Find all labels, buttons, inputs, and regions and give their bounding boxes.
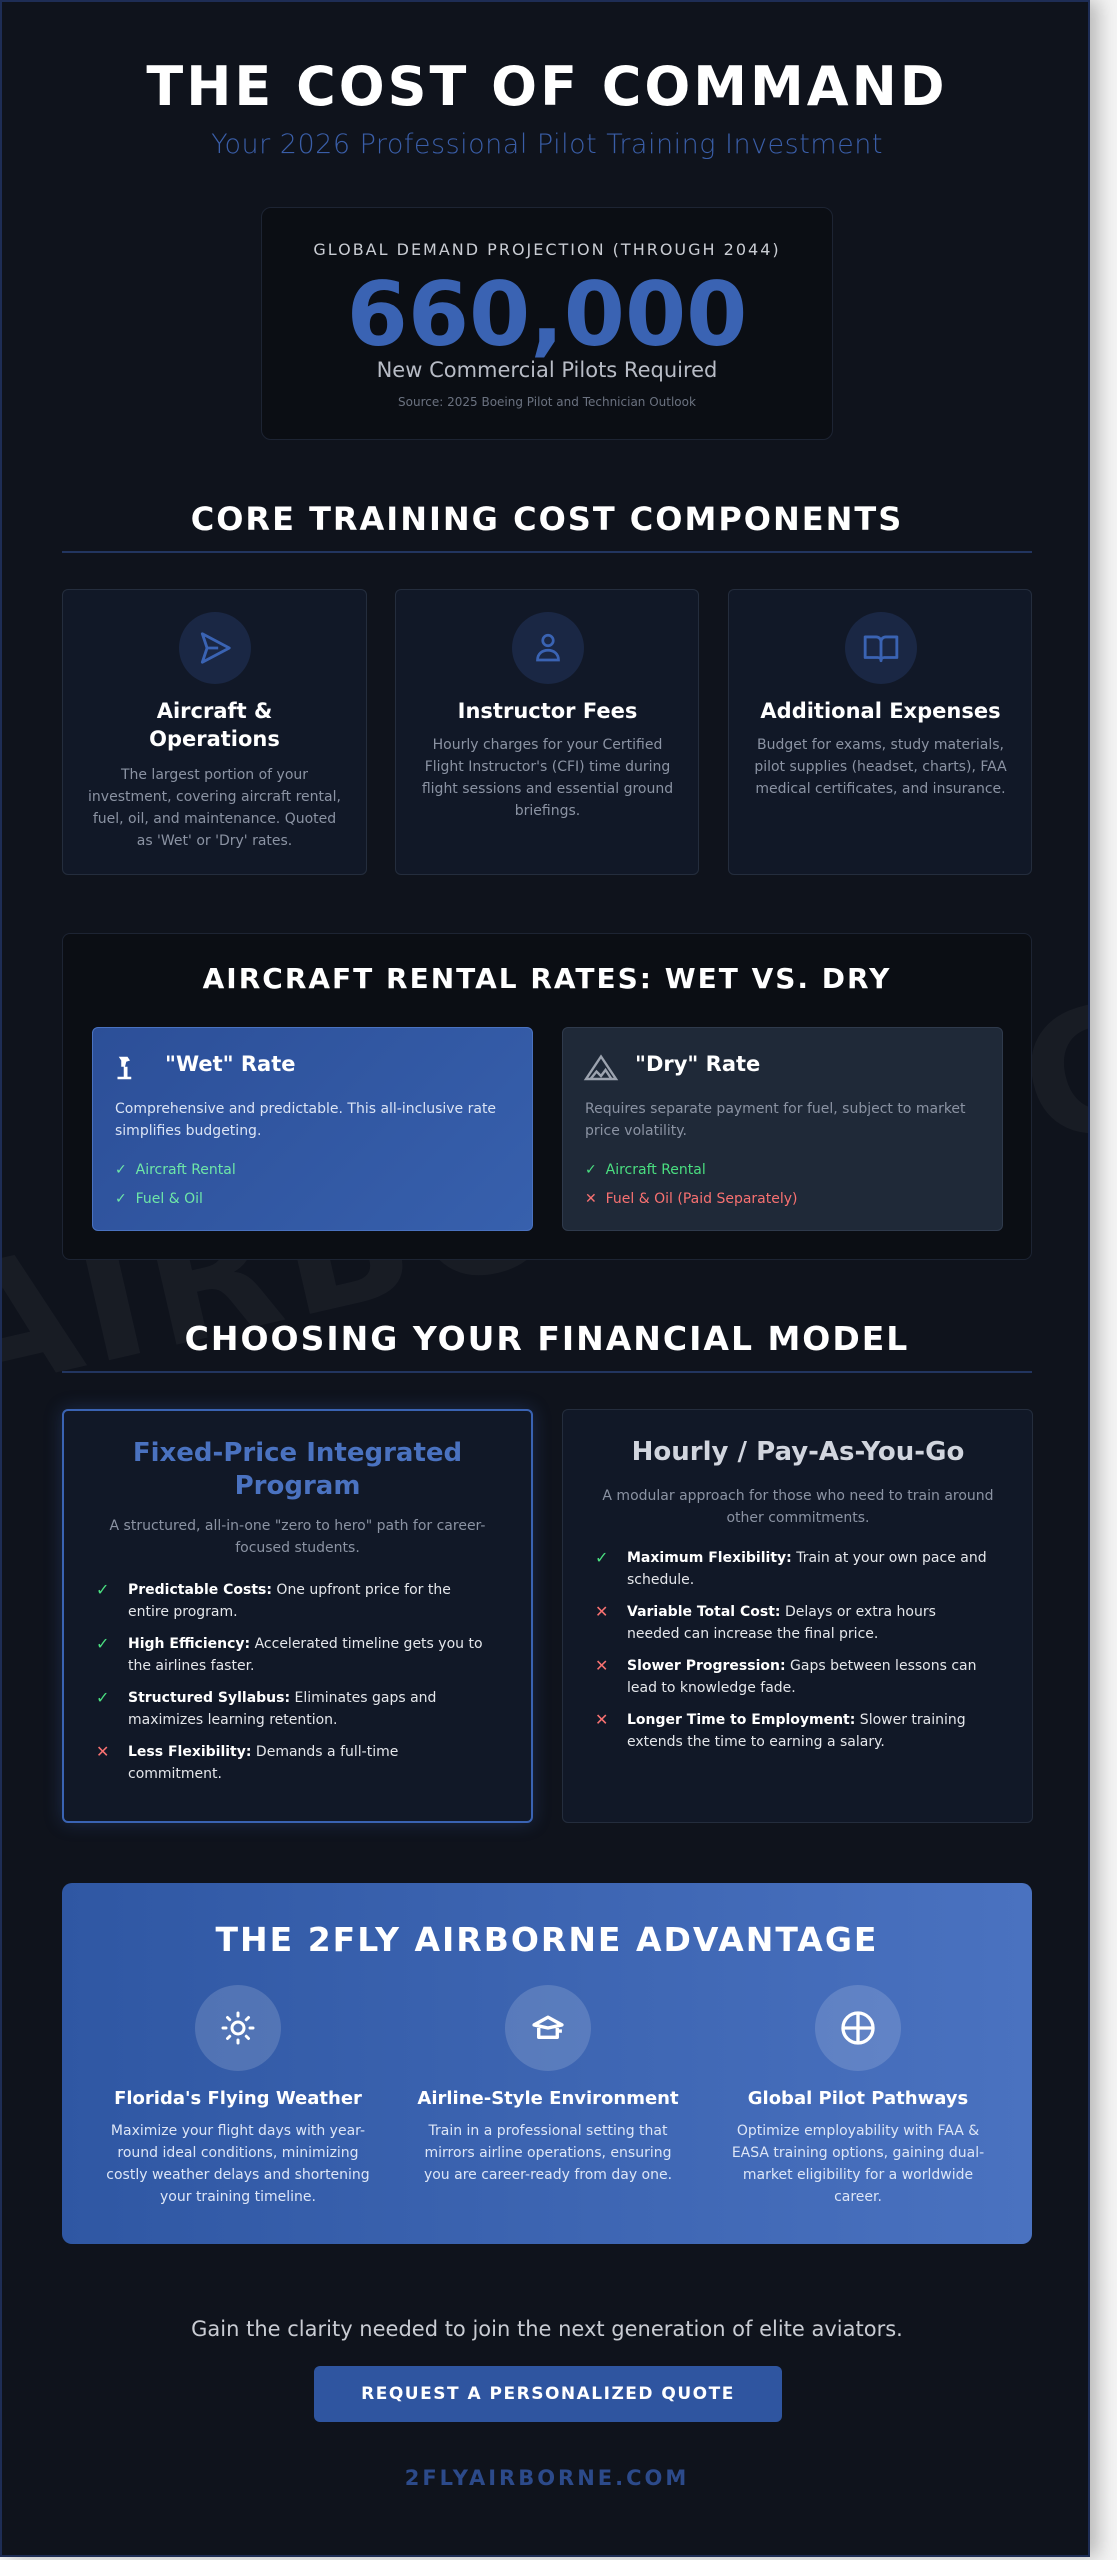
icon: mountain: [584, 1054, 618, 1080]
advantage heading: THE 2FLY AIRBORNE ADVANTAGE: [216, 1920, 878, 1959]
icon: cap: [505, 1985, 591, 2071]
stat box: [261, 207, 833, 440]
fixed list: ✕: [96, 1742, 109, 1761]
heading: financial model: CHOOSING YOUR FINANCIAL MODEL: [185, 1319, 909, 1358]
title: Global Pilot Pathways: [748, 2088, 968, 2109]
wet list: ✓ Aircraft Rental: [115, 1162, 236, 1178]
item: weather: [106, 1985, 370, 2205]
fixed list: Predictable Costs: One upfront price for the entire program.: [128, 1582, 451, 1620]
hourly list: [595, 1548, 987, 1750]
card: hourly: [562, 1409, 1033, 1823]
fixed list: ✓: [96, 1580, 109, 1599]
hourly list: Maximum Flexibility: Train at your own pace and schedule.: [627, 1550, 987, 1588]
card: wet rate: [92, 1027, 533, 1231]
fixed list: Less Flexibility: Demands a full-time commitment.: [128, 1744, 398, 1782]
fixed list: High Efficiency: Accelerated timeline gets you to the airlines faster.: [128, 1636, 483, 1674]
dry list: [585, 1162, 797, 1207]
stat source: Source: 2025 Boeing Pilot and Technician Outlook: [398, 395, 696, 409]
card title: Aircraft &: [157, 699, 272, 723]
hourly list: Longer Time to Employment: Slower training extends the time to earning a salary.: [627, 1712, 966, 1750]
fixed title: Fixed-Price Integrated Program: [133, 1438, 462, 1501]
icon: person: [512, 612, 584, 684]
tagline: Gain the clarity needed to join the next generation of elite aviators.: [191, 2317, 903, 2341]
text: Optimize employability with FAA & EASA training options, gaining dual-market eligibility for a worldwide career.: [732, 2123, 984, 2205]
fixed list: [96, 1580, 483, 1782]
hourly list: Slower Progression: Gaps between lessons can lead to knowledge fade.: [627, 1658, 976, 1696]
card title: Instructor Fees: [458, 699, 637, 723]
fixed list: Structured Syllabus: Eliminates gaps and maximizes learning retention.: [128, 1690, 436, 1728]
hourly list: ✕: [595, 1602, 608, 1621]
heading: core components: CORE TRAINING COST COMPONENTS: [191, 500, 903, 538]
dry text: Requires separate payment for fuel, subject to market price volatility.: [585, 1101, 966, 1139]
button: REQUEST A PERSONALIZED QUOTE: [361, 2384, 735, 2404]
fixed desc: A structured, all-in-one "zero to hero" path for career-focused students.: [110, 1518, 485, 1556]
card title: Operations: [149, 727, 280, 751]
item: airline style: [417, 1985, 679, 2183]
title: THE COST OF COMMAND: [146, 55, 948, 118]
subtitle: Your 2026 Professional Pilot Training Investment: [211, 129, 883, 160]
icon: paper plane: [179, 612, 251, 684]
button: [314, 2366, 782, 2422]
icon: sun: [195, 1985, 281, 2071]
fixed list: ✓: [96, 1688, 109, 1707]
title: Florida's Flying Weather: [114, 2088, 362, 2109]
icon: globe: [815, 1985, 901, 2071]
hourly list: ✕: [595, 1710, 608, 1729]
card: fixed-price program: [62, 1409, 533, 1823]
wet title: "Wet" Rate: [165, 1052, 296, 1076]
fixed list: ✓: [96, 1634, 109, 1653]
wet list: [115, 1162, 236, 1207]
card text: The largest portion of your investment, covering aircraft rental, fuel, oil, and maintenance. Quoted as 'Wet' or 'Dry' rates.: [88, 767, 341, 849]
card: dry rate: [562, 1027, 1003, 1231]
panel heading: AIRCRAFT RENTAL RATES: WET VS. DRY: [203, 962, 891, 995]
hourly list: Variable Total Cost: Delays or extra hours needed can increase the final price.: [627, 1604, 936, 1642]
panel: wet vs dry: [62, 933, 1032, 1260]
card text: Budget for exams, study materials, pilot supplies (headset, charts), FAA medical certificates, and insurance.: [754, 737, 1007, 797]
hourly list: ✓: [595, 1548, 608, 1567]
panel: advantage: [62, 1883, 1032, 2244]
card: aircraft & operations: [62, 589, 367, 875]
item: global: [732, 1985, 984, 2205]
card title: [149, 699, 280, 751]
wet text: Comprehensive and predictable. This all-inclusive rate simplifies budgeting.: [115, 1101, 496, 1139]
icon: fuel: [118, 1056, 132, 1080]
hourly list: ✕: [595, 1656, 608, 1675]
wet list: ✓ Fuel & Oil: [115, 1191, 203, 1207]
card text: Hourly charges for your Certified Flight Instructor's (CFI) time during flight sessions and essential ground briefings.: [422, 737, 673, 819]
footer url: 2FLYAIRBORNE.COM: [405, 2466, 689, 2490]
hourly desc: A modular approach for those who need to train around other commitments.: [602, 1488, 994, 1526]
text: Train in a professional setting that mirrors airline operations, ensuring you are career-ready from day one.: [424, 2123, 672, 2183]
card: additional expenses: [728, 589, 1032, 875]
stat number: 660,000: [347, 263, 747, 366]
dry title: "Dry" Rate: [635, 1052, 760, 1076]
dry list: ✓ Aircraft Rental: [585, 1162, 706, 1178]
card title: Additional Expenses: [760, 699, 1001, 723]
stat caption: New Commercial Pilots Required: [377, 358, 717, 382]
title: Airline-Style Environment: [417, 2088, 679, 2109]
icon: book: [845, 612, 917, 684]
hourly title: Hourly / Pay-As-You-Go: [632, 1437, 964, 1467]
text: Maximize your flight days with year-round ideal conditions, minimizing costly weather delays and shortening your training timeline.: [106, 2123, 370, 2205]
card: instructor fees: [395, 589, 699, 875]
dry list: ✕ Fuel & Oil (Paid Separately): [585, 1191, 797, 1207]
stat label: GLOBAL DEMAND PROJECTION (THROUGH 2044): [313, 240, 781, 259]
